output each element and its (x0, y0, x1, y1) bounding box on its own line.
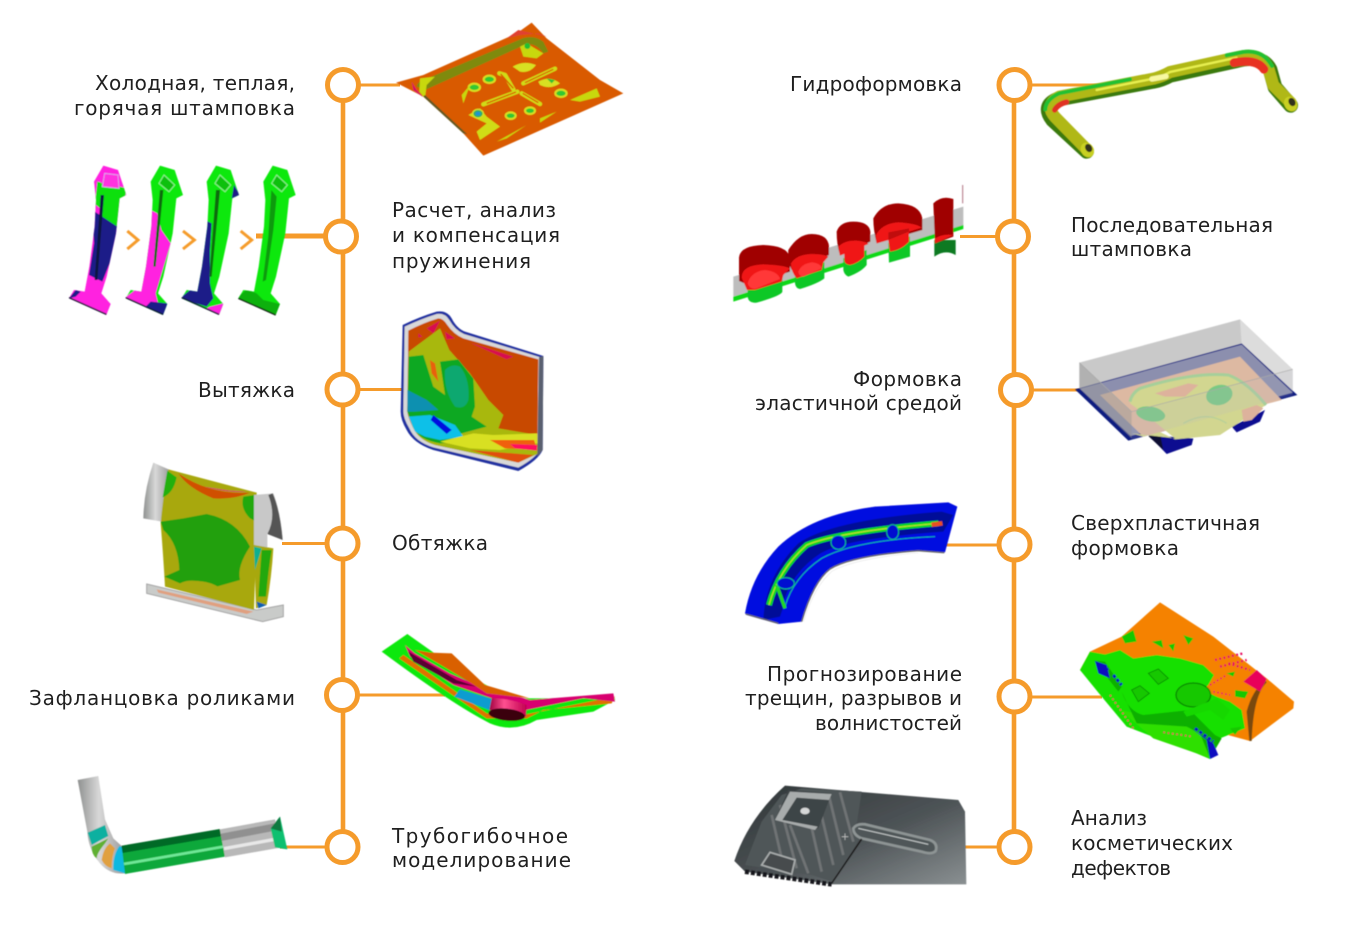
right timeline axis (945, 85, 1110, 847)
label: springback calculation: пружинения (392, 249, 531, 273)
left timeline axis (256, 85, 445, 847)
label: drawing: Вытяжка (198, 378, 295, 402)
label: cosmetic defects: косметических (1071, 831, 1233, 855)
label: hydroforming: Гидроформовка (790, 72, 962, 96)
label: stretch forming: Обтяжка (392, 531, 488, 555)
iteration 1 (69, 165, 127, 316)
punches (739, 245, 790, 285)
label: springback calculation: Расчет, анализ (392, 198, 556, 222)
label: crack prediction (745, 662, 962, 735)
label: cosmetic defects: дефектов (1071, 856, 1171, 880)
image: springback compensation, four iterations (67, 163, 300, 317)
image: superplastic forming (745, 502, 957, 624)
label: progressive stamping (1071, 213, 1273, 261)
label: tube bending: моделирование (392, 848, 571, 872)
label: tube bending (391, 824, 571, 872)
label: springback calculation (392, 198, 560, 273)
left timeline nodes (326, 70, 358, 862)
label: roller hemming: Зафланцовка роликами (29, 686, 295, 710)
image: cosmetic defect analysis (734, 786, 966, 884)
label: cold, warm, hot stamping (74, 71, 295, 120)
right timeline nodes (998, 70, 1032, 862)
iteration 4 (237, 163, 300, 317)
label: progressive stamping: Последовательная (1071, 213, 1273, 237)
image: roller hemming (382, 634, 615, 728)
label: tube bending: Трубогибочное (391, 824, 568, 848)
image: deep drawing part (401, 311, 543, 471)
iteration 3 (180, 163, 243, 317)
label: cosmetic defects (1071, 806, 1233, 880)
cups below the strip (748, 275, 782, 303)
image: hydroforming tube (1045, 52, 1300, 160)
image: crack, tear and wrinkle prediction (1080, 602, 1294, 759)
label: cold, warm, hot stamping: горячая штамповка (74, 96, 295, 120)
image: tube bending (78, 776, 287, 874)
label: crack prediction: Прогнозирование (767, 662, 962, 686)
label: cold, warm, hot stamping: Холодная, теплая, (95, 71, 295, 95)
label: cosmetic defects: Анализ (1071, 806, 1147, 830)
label: crack prediction: трещин, разрывов и (745, 686, 962, 710)
image: rubber-pad forming (1075, 319, 1297, 454)
label: springback calculation: и компенсация (392, 223, 560, 247)
label: crack prediction: волнистостей (815, 711, 962, 735)
image: progressive die stamping (733, 185, 963, 303)
springback iteration arrows (127, 231, 252, 249)
iteration 2 (124, 163, 187, 317)
label: progressive stamping: штамповка (1071, 237, 1192, 261)
label: elastic medium forming: эластичной средой (755, 391, 962, 415)
image: cold, warm and hot stamping plate (396, 23, 623, 156)
label: elastic medium forming: Формовка (853, 367, 962, 391)
image: stretch forming (143, 463, 283, 622)
label: superplastic forming: формовка (1071, 536, 1179, 560)
label: elastic medium forming (755, 367, 962, 415)
label: superplastic forming (1071, 511, 1260, 560)
label: superplastic forming: Сверхпластичная (1071, 511, 1260, 535)
